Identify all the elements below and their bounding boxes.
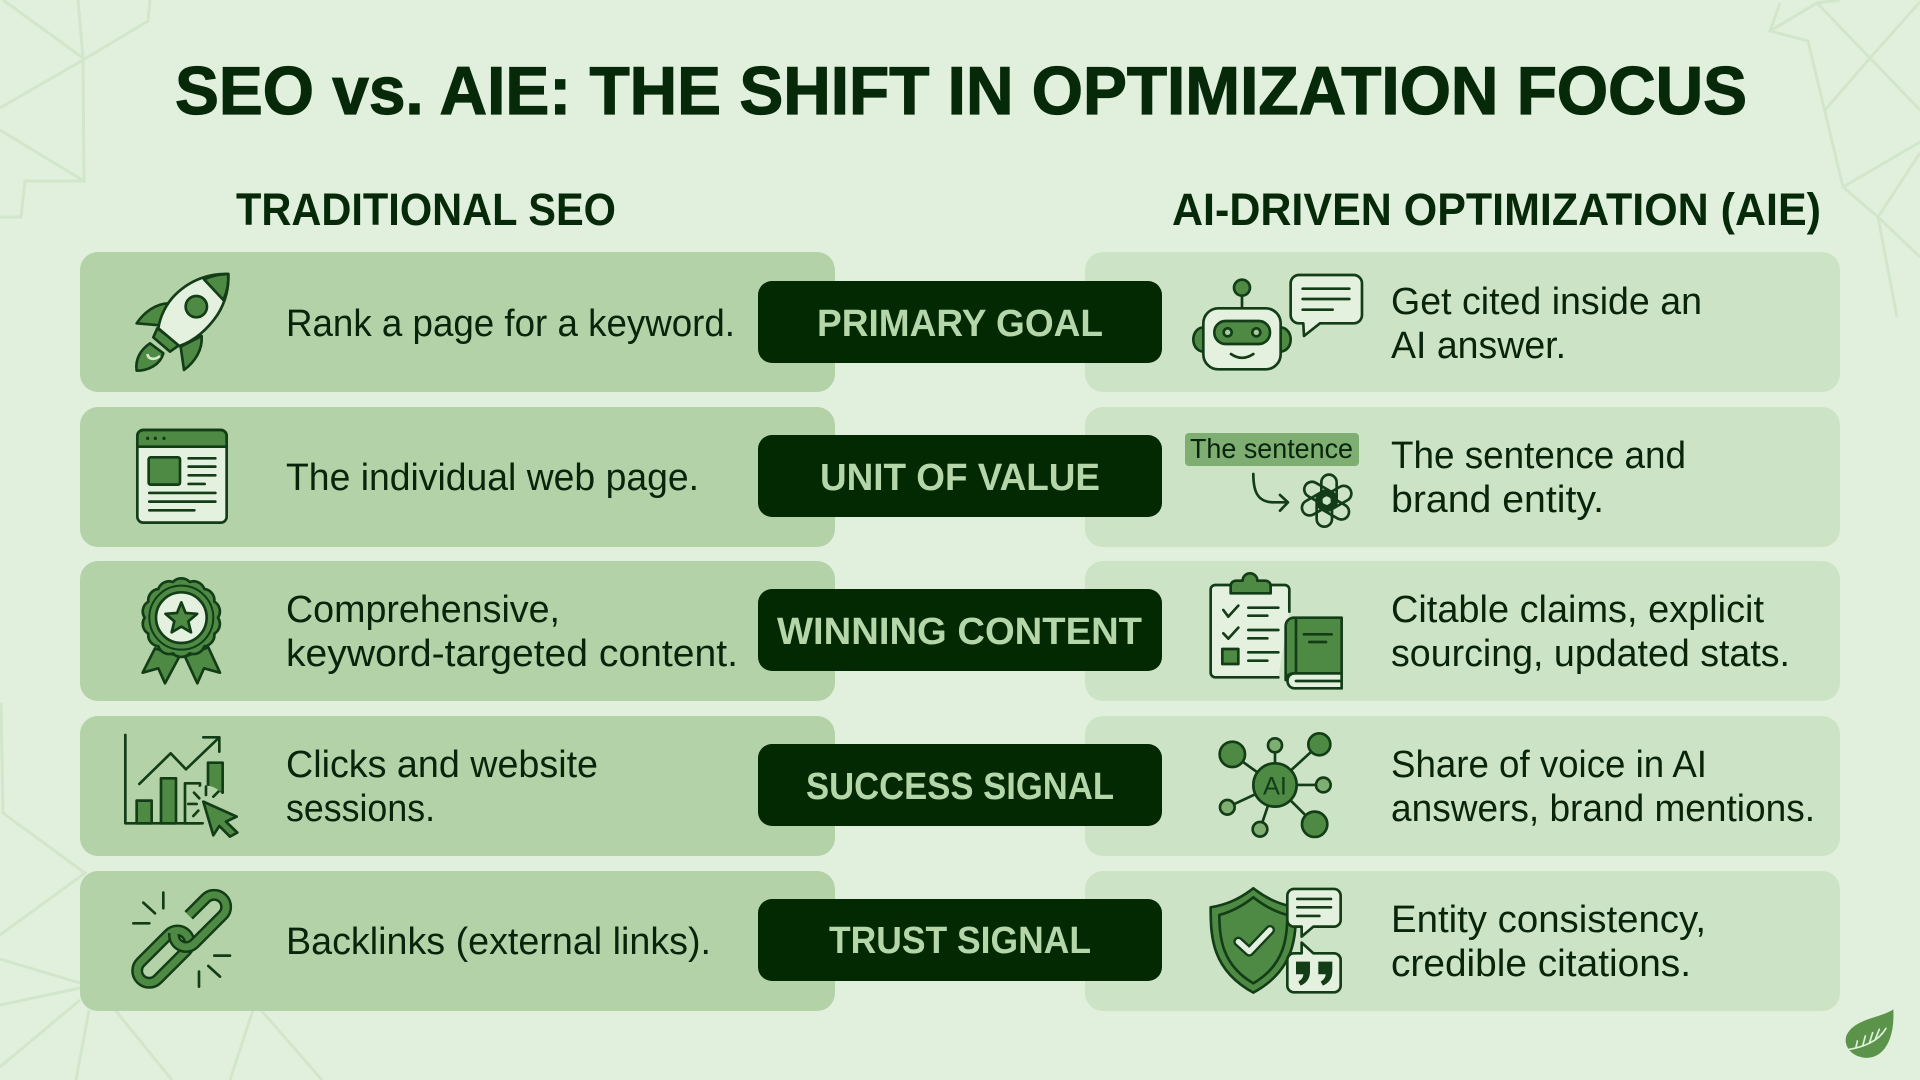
heading: AI-driven optimization: AI-DRIVEN OPTIMIZATION (AIE) — [1172, 184, 1821, 235]
text: sentence and brand: The sentence and — [1391, 435, 1686, 477]
icon: award badge — [143, 578, 220, 683]
label pill: success signal: SUCCESS SIGNAL — [806, 766, 1114, 808]
label pill: winning content — [758, 589, 1162, 671]
label pill: trust signal — [758, 899, 1162, 981]
text: entity consistency: Entity consistency, — [1391, 899, 1706, 941]
text: backlinks: Backlinks (external links). — [286, 921, 711, 963]
icon: robot with speech bubble — [1193, 275, 1362, 369]
text: comprehensive content: Comprehensive, — [286, 589, 560, 631]
text: individual web page: The individual web page. — [286, 457, 699, 499]
text: clicks and sessions: sessions. — [286, 788, 435, 830]
icon: chart with cursor — [125, 735, 237, 837]
label pill: trust signal: TRUST SIGNAL — [829, 920, 1091, 962]
panel: AIE winning content — [1085, 561, 1840, 701]
text: comprehensive content — [286, 589, 738, 675]
text: clicks and sessions: Clicks and website — [286, 744, 598, 786]
text: get cited: Get cited inside an — [1391, 281, 1702, 323]
text: citable claims: sourcing, updated stats. — [1391, 633, 1790, 675]
icon: leaf logo — [1846, 1009, 1893, 1058]
label pill: success signal — [758, 744, 1162, 826]
text: share of voice: answers, brand mentions. — [1391, 788, 1815, 830]
text: comprehensive content: keyword-targeted content. — [286, 633, 738, 675]
title: SEO vs. AIE: THE SHIFT IN OPTIMIZATION FOCUS — [175, 53, 1747, 129]
panel: AIE success signal — [1085, 716, 1840, 856]
icon: chain link — [132, 890, 231, 988]
label pill: winning content: WINNING CONTENT — [777, 611, 1142, 653]
text: rank a page: Rank a page for a keyword. — [286, 303, 735, 345]
text: share of voice: Share of voice in AI — [1391, 744, 1707, 786]
label pill: unit of value: UNIT OF VALUE — [820, 457, 1100, 499]
panel: SEO success signal — [80, 716, 835, 856]
text: clicks and sessions — [286, 744, 598, 830]
panel: SEO primary goal — [80, 252, 835, 392]
icon: web page — [137, 430, 227, 523]
text: get cited: AI answer. — [1391, 325, 1566, 367]
panel: AIE primary goal — [1085, 252, 1840, 392]
panel: SEO trust signal — [80, 871, 835, 1011]
text: entity consistency — [1391, 899, 1706, 985]
text: share of voice — [1391, 744, 1815, 830]
icon: rocket — [136, 274, 228, 371]
text: entity consistency: credible citations. — [1391, 943, 1691, 985]
icon: sentence tag to AI knot: The sentence — [1190, 433, 1353, 464]
label pill: primary goal — [758, 281, 1162, 363]
icon: checklist and book — [1211, 573, 1342, 688]
text: sentence and brand — [1391, 435, 1686, 521]
label pill: unit of value — [758, 435, 1162, 517]
panel: AIE unit of value — [1085, 407, 1840, 547]
panel: SEO winning content — [80, 561, 835, 701]
label pill: primary goal: PRIMARY GOAL — [817, 303, 1103, 345]
panel: SEO unit of value — [80, 407, 835, 547]
heading: traditional SEO: TRADITIONAL SEO — [236, 184, 616, 235]
text: citable claims — [1391, 589, 1790, 675]
panel: AIE trust signal — [1085, 871, 1840, 1011]
text: citable claims: Citable claims, explicit — [1391, 589, 1764, 631]
icon: shield with bubbles — [1211, 888, 1341, 993]
text: get cited — [1391, 281, 1702, 367]
icon: sentence tag to AI knot — [1185, 433, 1359, 527]
text: sentence and brand: brand entity. — [1391, 479, 1604, 521]
icon: AI network: AI — [1263, 772, 1287, 800]
icon: AI network — [1220, 733, 1331, 837]
